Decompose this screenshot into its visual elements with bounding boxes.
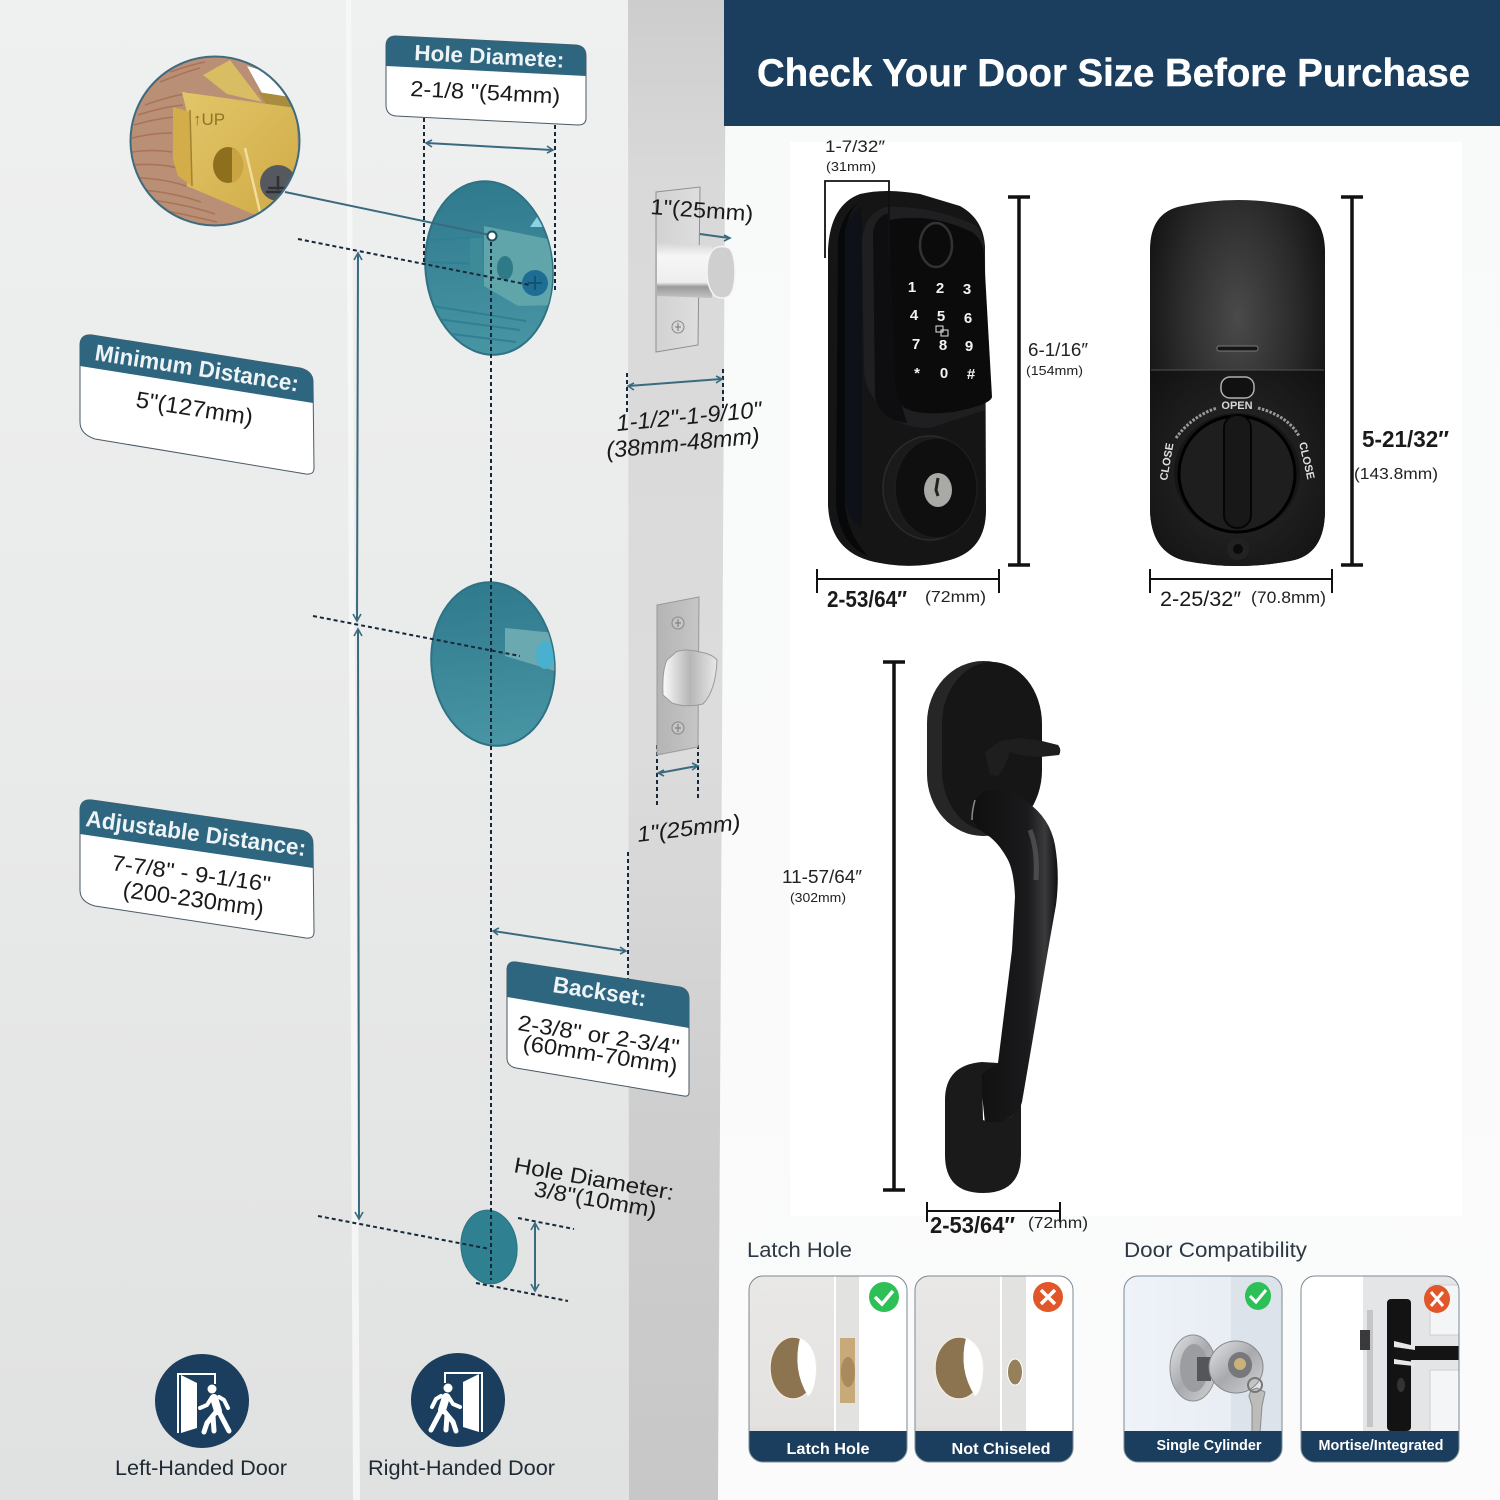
label: backset: (60mm-70mm) (521, 1030, 679, 1079)
door edge strip (628, 0, 726, 1500)
card: mortise or integrated (1301, 1276, 1459, 1462)
heading: door compatibility: Door Compatibility (1124, 1239, 1308, 1262)
dimensions: handle height: 11-57/64″ (782, 867, 863, 887)
label: minimum distance: 5"(127mm) (134, 386, 255, 430)
smart lock front view: 2 (936, 280, 944, 297)
dimensions: lock front height: 6-1/16″ (1028, 340, 1089, 360)
dimension arrows (353, 140, 730, 1291)
label: adjustable distance: 7-7/8" - 9-1/16" (110, 850, 272, 897)
lock back view: CLOSE (1158, 442, 1177, 482)
smart lock front view: 7 (912, 336, 920, 353)
caption: right-handed door: Right-Handed Door (368, 1457, 555, 1480)
dimensions: lock front height: (154mm) (1026, 363, 1083, 378)
dimensions: handle width: (72mm) (1028, 1215, 1088, 1232)
dimensions: lock back height (1341, 197, 1449, 565)
upper hole with teal overlay (424, 180, 554, 356)
lock back view (1150, 200, 1325, 570)
text: thickness and bolt dimensions (512, 194, 765, 1222)
label: hole diameter: Hole Diamete: (414, 40, 565, 73)
smart lock front view: 0 (940, 365, 948, 382)
card: latch hole correct: Latch Hole (786, 1441, 870, 1458)
card: latch hole correct (749, 1276, 907, 1462)
exterior pull handle (927, 661, 1060, 1193)
label: adjustable distance: Adjustable Distance: (84, 805, 308, 861)
dimensions: lock back height: 5-21/32″ (1362, 426, 1449, 452)
leader line from detail circle to hole (285, 192, 496, 240)
middle hole with teal overlay (430, 581, 556, 747)
text: thickness and bolt dimensions: 1"(25mm) (650, 194, 754, 226)
card: not chiseled (915, 1276, 1073, 1462)
smart lock front view: * (914, 365, 920, 382)
smart lock front view: 8 (939, 337, 947, 354)
dimensions: handle height: (302mm) (790, 890, 846, 905)
lower hole with teal overlay (457, 1207, 521, 1287)
label: adjustable distance: (200-230mm) (121, 876, 266, 921)
caption: left-handed door: Left-Handed Door (115, 1457, 287, 1480)
dimension guide lines (298, 118, 723, 1301)
text: thickness and bolt dimensions: 1"(25mm) (636, 809, 742, 847)
label: backset (507, 962, 689, 1096)
lock back view: OPEN (1221, 400, 1253, 412)
dimensions: lock back width: (70.8mm) (1251, 588, 1326, 607)
label: hole diameter: 2-1/8 "(54mm) (410, 76, 561, 109)
dimensions: handle width: 2-53/64″ (930, 1212, 1015, 1238)
text: thickness and bolt dimensions: (38mm-48mm) (605, 422, 761, 463)
text: thickness and bolt dimensions: 1-1/2"-1-9/10" (615, 396, 765, 436)
label: hole diameter (386, 36, 586, 125)
text: thickness and bolt dimensions: 3/8"(10mm) (532, 1176, 659, 1222)
smart lock front view: 3 (963, 281, 971, 298)
lock back view: CLOSE (1296, 441, 1316, 481)
dimensions: lock back height: (143.8mm) (1354, 466, 1438, 483)
label: backset: 2-3/8" or 2-3/4" (516, 1010, 681, 1060)
dimensions: handle height (782, 662, 905, 1190)
label: minimum distance: Minimum Distance: (93, 339, 301, 396)
dimensions: lock front height (1008, 197, 1089, 565)
dimensions: lock front width (817, 569, 999, 612)
dimensions: lock back width: 2-25/32″ (1160, 588, 1242, 611)
icon: left-handed door (155, 1354, 249, 1448)
zoom detail circle: gold latch plate: ↑UP (193, 110, 225, 129)
card: not chiseled: Not Chiseled (952, 1441, 1050, 1458)
card: mortise or integrated: Mortise/Integrated (1318, 1437, 1444, 1454)
dimensions: lock depth: (31mm) (826, 159, 876, 174)
title banner (724, 0, 1500, 126)
latch strike plate (657, 597, 717, 755)
label: backset: Backset: (551, 971, 648, 1011)
door face background (0, 0, 730, 1500)
smart lock front view: # (967, 366, 976, 383)
title banner: Check Your Door Size Before Purchase (757, 52, 1470, 95)
smart lock front view: 9 (965, 338, 973, 355)
card: single cylinder (1124, 1276, 1282, 1462)
icon: right-handed door (411, 1353, 505, 1447)
smart lock front view: 6 (964, 310, 972, 327)
deadbolt strike plate (656, 187, 735, 352)
smart lock front view: 4 (910, 307, 919, 324)
zoom detail circle: gold latch plate (128, 55, 303, 230)
smart lock front view: 1 (908, 279, 916, 296)
dimensions: lock depth: 1-7/32″ (825, 137, 885, 156)
dimensions: lock front width: 2-53/64″ (827, 586, 907, 612)
dimensions: lock front width: (72mm) (925, 589, 986, 606)
dimensions: lock depth (825, 137, 889, 260)
smart lock front view (828, 191, 992, 566)
label: minimum distance (80, 335, 314, 474)
smart lock front view: 5 (937, 308, 945, 325)
dimensions: handle width (927, 1202, 1088, 1238)
card: single cylinder: Single Cylinder (1156, 1437, 1262, 1454)
label: adjustable distance (80, 800, 314, 938)
right panel background (718, 0, 1500, 1500)
text: thickness and bolt dimensions: Hole Diameter: (512, 1152, 676, 1205)
dimensions: lock back width (1150, 569, 1332, 611)
heading: latch hole: Latch Hole (747, 1239, 852, 1262)
